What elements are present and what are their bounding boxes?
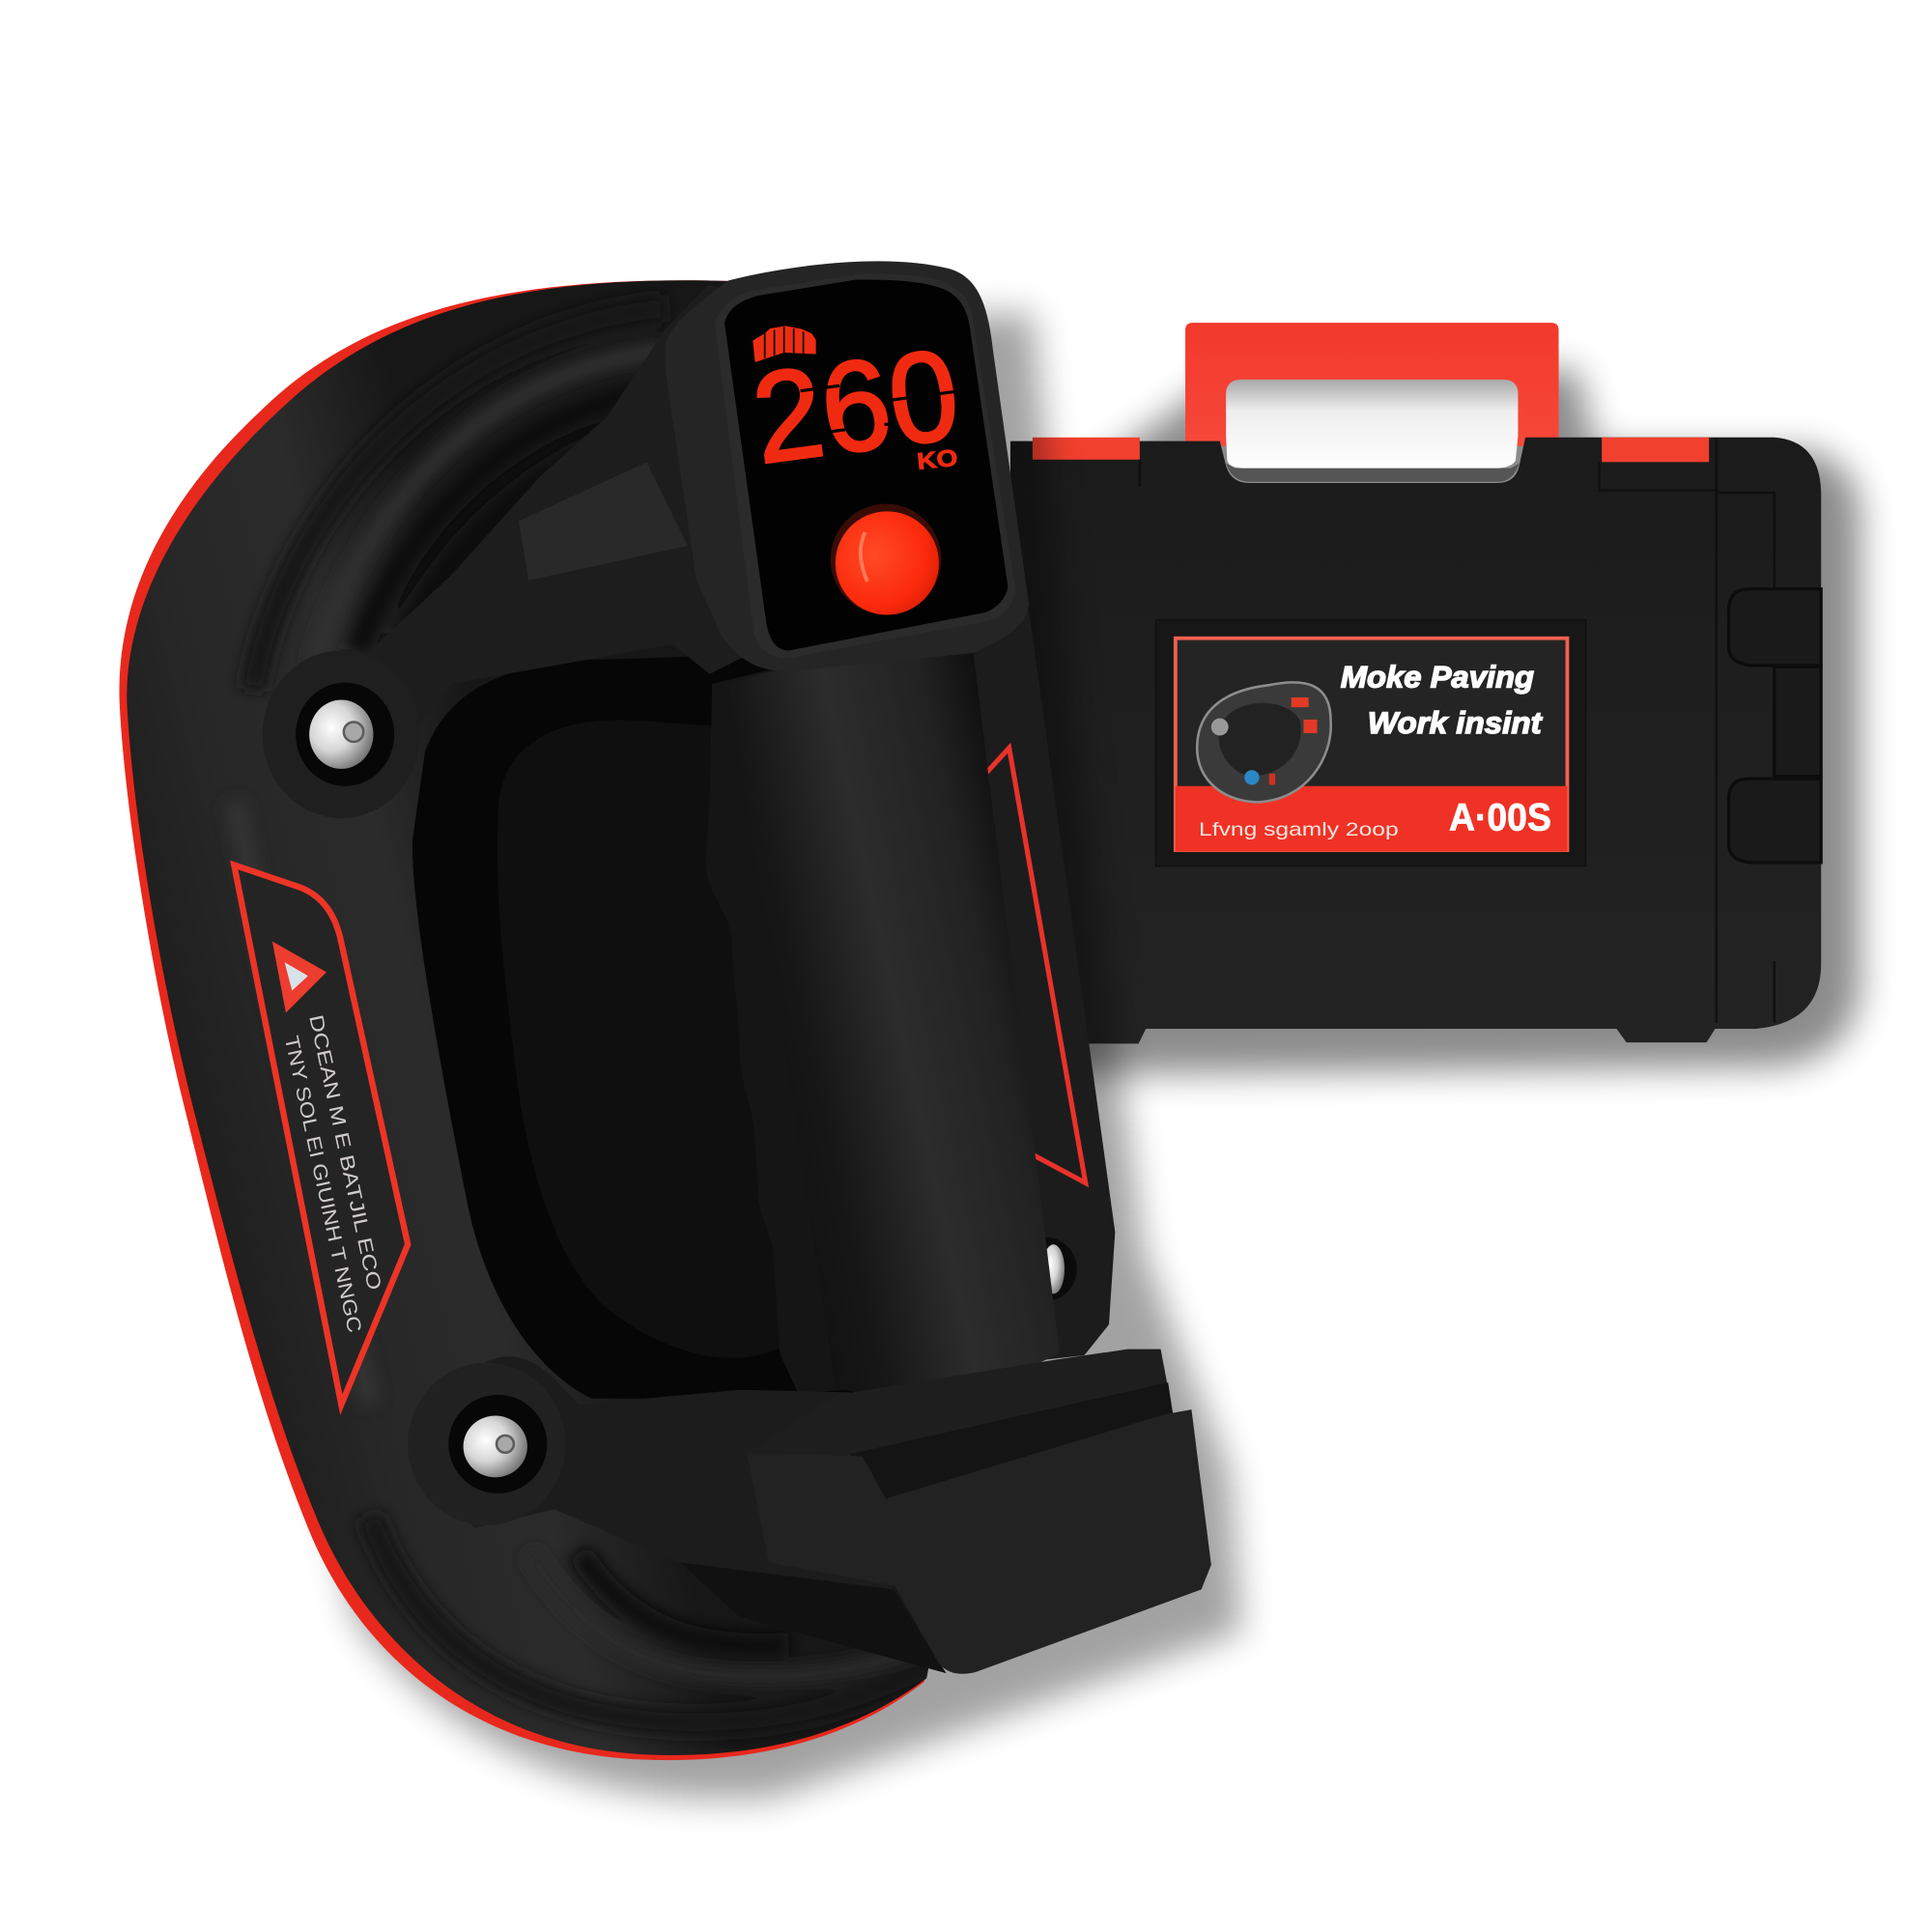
- foot arm panel: [747, 1453, 895, 1586]
- label heading line 1: Moke Paving: [1341, 660, 1534, 695]
- left red latch: [1033, 438, 1140, 460]
- upper arm panel: [519, 462, 688, 581]
- red carry handle: [1185, 323, 1559, 446]
- label red band: [1176, 786, 1567, 851]
- warning text line 2: TNY SOL EI GIUINH T NNGC: [280, 1034, 365, 1335]
- label outline: [234, 865, 408, 1405]
- triangle centre: [285, 962, 308, 991]
- case moulding lines: [1140, 439, 1775, 1023]
- lifter head: [666, 261, 1029, 671]
- bottom rings: [370, 1516, 936, 1722]
- bolt hub: [263, 650, 420, 818]
- lifter shadow: [157, 313, 1242, 1800]
- lower bolt: [448, 1395, 547, 1493]
- red button: [831, 504, 941, 614]
- warning label: [234, 865, 408, 1405]
- LED reading: [745, 323, 967, 491]
- suction pad body: [127, 280, 985, 1755]
- central cavity: [412, 653, 887, 1399]
- foot block: [887, 1409, 1211, 1674]
- label recess: [1155, 620, 1586, 867]
- product scene: [120, 261, 1884, 1821]
- carry case: [1010, 323, 1861, 1074]
- LED digits: 260: [745, 323, 967, 491]
- foot collar: [747, 1350, 1173, 1511]
- LED segment gaps: [752, 370, 962, 441]
- right red latch: [1602, 438, 1709, 462]
- label tagline: Lfvng sgamly 2oop: [1199, 820, 1399, 840]
- frame soft highlight: [234, 801, 370, 1405]
- case label: [1155, 620, 1586, 867]
- foot underside: [680, 1562, 947, 1673]
- rear frame strip: [936, 610, 1115, 1368]
- case body: [1010, 438, 1821, 1043]
- top bolt: [263, 650, 420, 818]
- label model number: A·00S: [1449, 797, 1551, 839]
- pad concentric rings: [252, 308, 936, 1722]
- signal bar icon: [753, 326, 816, 362]
- grip cylinder: [729, 651, 1060, 1395]
- warning triangle: [272, 941, 327, 1012]
- right hinge blocks: [1729, 589, 1821, 863]
- top rings: [252, 308, 666, 690]
- lower bolt hub: [408, 1363, 565, 1525]
- handle opening: [1226, 380, 1518, 469]
- label heading line 2: Work insint: [1368, 705, 1543, 740]
- grip fingers: [706, 666, 887, 1394]
- label product thumbnail: [1197, 682, 1331, 802]
- warning text line 1: DCEAN M E BATJIL ECO: [304, 1013, 384, 1293]
- lower arm: [408, 1356, 894, 1602]
- rear warning outline: [983, 748, 1086, 1182]
- head casing: [666, 261, 1029, 671]
- suction lifter: [120, 261, 1242, 1800]
- label frame: [1176, 639, 1567, 850]
- upper arm: [296, 285, 752, 739]
- suction pad red rim: [120, 280, 985, 1760]
- rear bolt: [1012, 1237, 1077, 1301]
- case shadow: [1060, 370, 1861, 1074]
- LED unit: KO: [916, 445, 959, 475]
- inner pad face: [497, 720, 788, 1358]
- handle lower lip: [1226, 464, 1520, 482]
- display screen: [724, 279, 1008, 650]
- display bezel: [715, 273, 1015, 658]
